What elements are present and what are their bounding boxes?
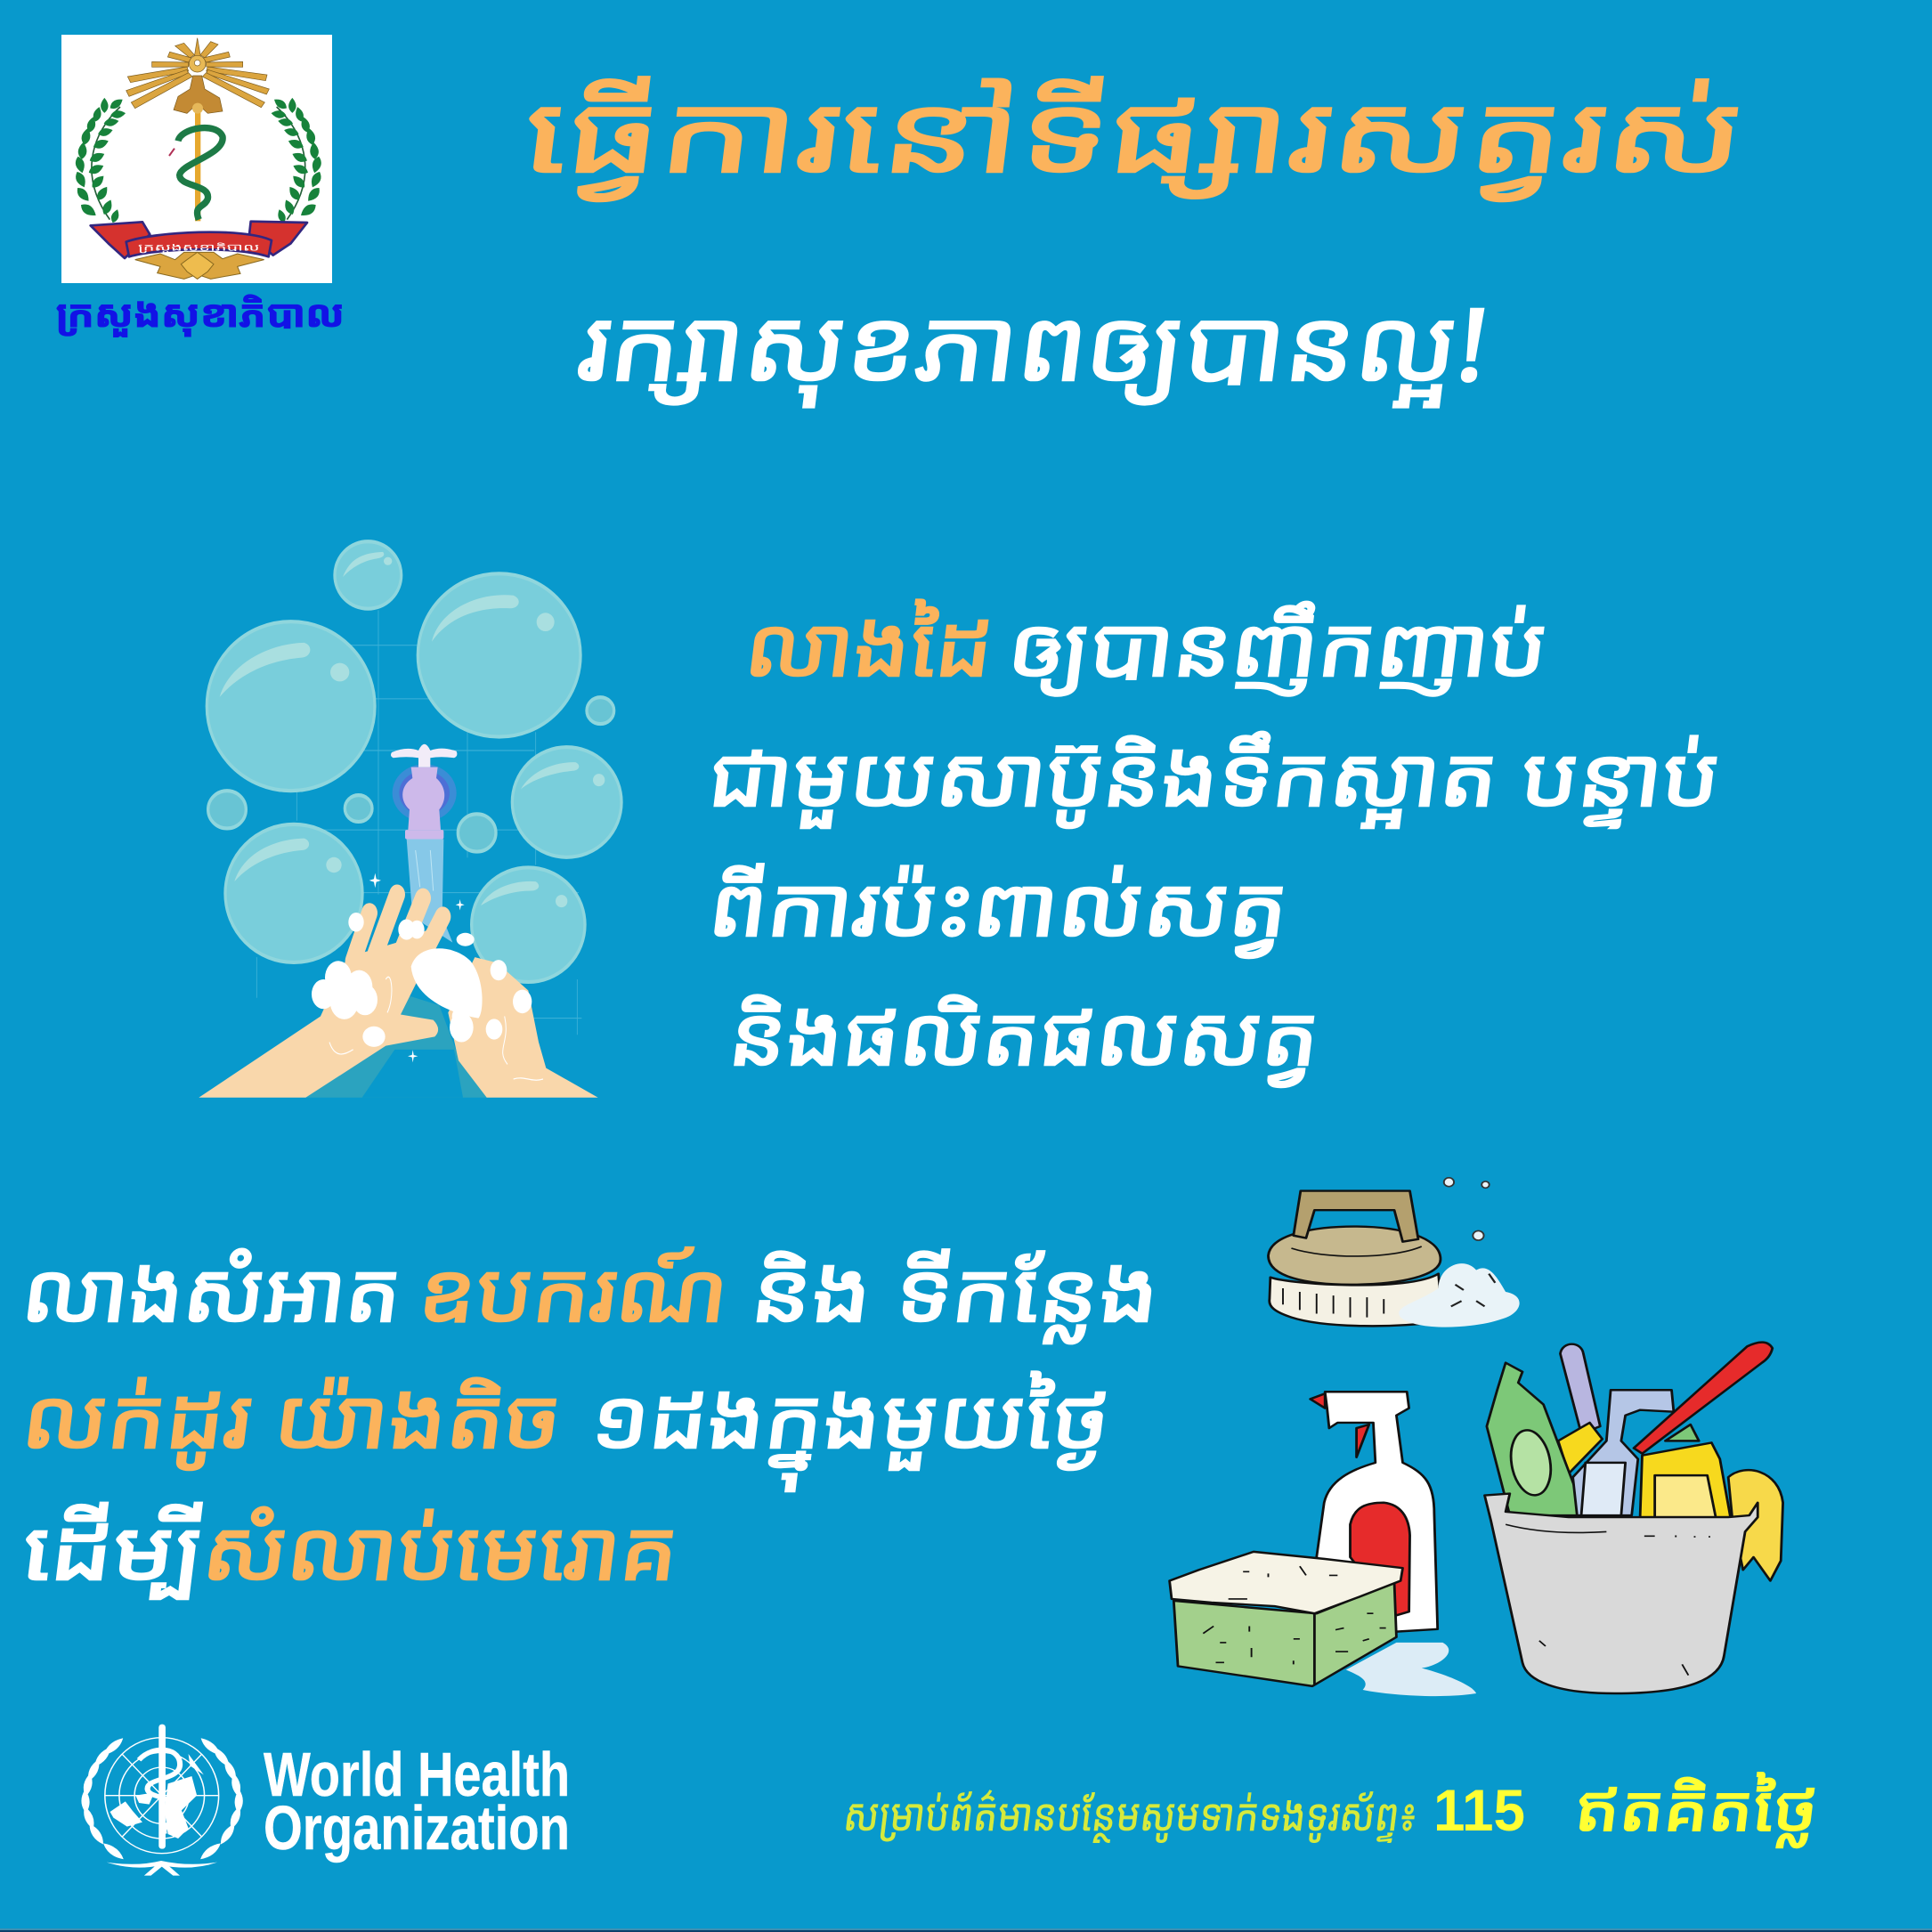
line 2: លក់ដូរ យ៉ាងតិច — [17, 1360, 569, 1473]
subtitle: រក្សាសុខភាពឲ្យបានល្អ! — [572, 273, 1497, 410]
illustration: cleaning supplies — [1170, 1178, 1783, 1696]
icon: spray bottle — [1311, 1392, 1438, 1632]
continents — [110, 1776, 197, 1839]
icon: soap and foam — [312, 873, 532, 1062]
line 1: លាងសំអាត — [17, 1234, 409, 1346]
icon: scrub brush — [1268, 1191, 1442, 1326]
line 3 — [17, 1492, 686, 1604]
logo: Ministry of Health emblem — [61, 35, 332, 283]
hotline number: 115 — [1433, 1777, 1525, 1843]
bubble highlights — [220, 552, 605, 907]
icon: staff and serpent — [169, 103, 223, 221]
footer: hotline information: សម្រាប់ព័ត៌មានបន្ថែមសូមទាក់ទងទូរស័ព្ទ៖ — [840, 1782, 1422, 1844]
icon: red ribbon — [91, 222, 307, 258]
staff and serpent — [139, 1725, 204, 1849]
icon: water basin shadow — [305, 994, 492, 1098]
icon: washing hands — [199, 895, 598, 1098]
logo caption: ministry name: ក្រសួងសុខាភិបាល — [56, 288, 345, 338]
icon: bucket — [1485, 1494, 1757, 1693]
line 1: ឲ្យបានញឹកញាប់ — [1004, 589, 1555, 701]
logo ribbon text: ក្រសួងសុខាភិបាល — [138, 241, 260, 255]
icon: left laurel branch — [73, 96, 126, 223]
icon: right laurel branch — [271, 96, 323, 223]
logo text: World Health Organization — [264, 1740, 570, 1863]
line 3: ពីការប៉ះពាល់សត្វ — [703, 848, 1295, 961]
logo: World Health Organization emblem — [81, 1725, 243, 1876]
line 3: សំលាប់មេរោគ — [198, 1492, 686, 1604]
line 2: ១ដងក្នុងមួយថ្ងៃ — [583, 1360, 1117, 1490]
bubbles — [207, 541, 621, 982]
icon: gold floral ornament — [135, 252, 264, 279]
icon: faucet — [391, 744, 457, 943]
free of charge: ឥតគិតថ្លៃ — [1571, 1764, 1823, 1849]
title: ធ្វើការនៅទីផ្សារសត្វរស់ — [516, 55, 1754, 204]
line 2: ជាមួយសាប៊ូនិងទឹកស្អាត បន្ទាប់ — [703, 718, 1727, 831]
footer: hotline information — [840, 1764, 1823, 1849]
icon: foam and bubbles — [1399, 1178, 1520, 1327]
icon: contents of bucket — [1487, 1343, 1783, 1581]
icon: water puddle — [1346, 1643, 1476, 1696]
line 4: និងផលិតផលសត្វ — [724, 978, 1327, 1090]
line 1: ឧបករណ៍ — [413, 1234, 735, 1346]
text block: cleaning advice — [17, 1234, 1166, 1604]
text block: handwashing advice — [703, 589, 1727, 1090]
line 2 — [17, 1360, 1117, 1490]
line 1 — [740, 589, 1555, 701]
olive wreath — [81, 1735, 243, 1876]
line 3: ដើម្បី — [17, 1492, 211, 1604]
line 1 — [17, 1234, 1166, 1346]
line 1: លាងដៃ — [740, 589, 1000, 701]
logo text: World Health Organization: Organization — [264, 1793, 570, 1863]
icon: sponge — [1170, 1552, 1402, 1686]
illustration: handwashing with bubbles — [199, 541, 621, 1098]
icon: golden sun rays — [126, 38, 269, 113]
globe — [105, 1738, 219, 1854]
logo text: World Health Organization: World Health — [264, 1740, 570, 1809]
line 1: និង ទីកន្លែង — [746, 1234, 1166, 1346]
